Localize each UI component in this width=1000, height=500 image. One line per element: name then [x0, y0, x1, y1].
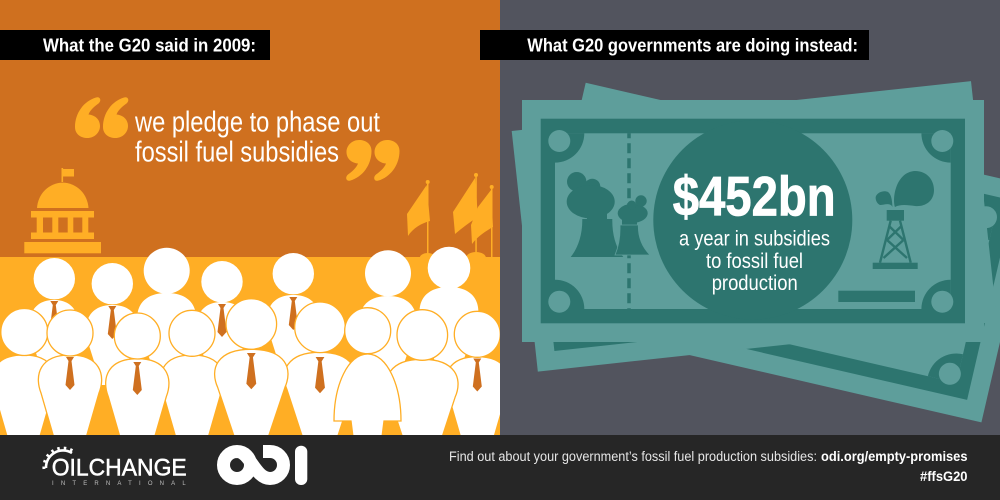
figure and caption: production	[712, 271, 798, 295]
call to action text: odi.org/empty-promises	[821, 449, 968, 464]
quote text: fossil fuel subsidies	[135, 137, 339, 169]
quote text: we pledge to phase out	[134, 107, 380, 139]
icon: flags	[407, 173, 494, 264]
delegate 7	[334, 308, 401, 437]
front banknote	[522, 100, 984, 342]
logo: ODI	[224, 446, 307, 485]
icon: capitol building	[24, 168, 101, 253]
icon: closing quotation mark	[346, 140, 400, 181]
crowd of delegates	[0, 247, 509, 449]
call to action text	[449, 449, 968, 484]
serial bar	[838, 291, 915, 302]
dashed tear line	[627, 133, 631, 309]
delegate 3	[106, 313, 169, 449]
delegate 1	[0, 308, 55, 445]
back row of delegates	[30, 247, 478, 385]
delegate 5	[215, 299, 288, 439]
figure and caption: $452bn	[673, 165, 836, 228]
heading: what the G20 said in 2009	[0, 30, 270, 60]
quote text	[134, 107, 380, 169]
middle banknote rotated counter-clockwise	[512, 81, 997, 372]
delegate 4	[160, 310, 224, 445]
icon: oil derrick	[873, 171, 934, 269]
delegate 6	[284, 302, 356, 442]
heading: what G20 governments are doing instead: What G20 governments are doing instead:	[527, 36, 858, 56]
banknote stack	[512, 81, 1000, 422]
icon: power plant cooling towers	[567, 172, 650, 257]
delegate 8	[387, 310, 458, 449]
front row of delegates	[0, 299, 509, 449]
footer bar	[0, 435, 1000, 500]
call to action text: #ffsG20	[920, 469, 968, 484]
central circle	[653, 120, 852, 320]
delegate 9	[446, 311, 509, 447]
panel: what G20 governments are doing instead	[480, 0, 1000, 435]
back banknote rotated clockwise	[531, 83, 1000, 422]
heading: what G20 governments are doing instead	[480, 30, 869, 60]
figure and caption	[673, 165, 836, 295]
logo: Oil Change International: OILCHANGE	[52, 455, 187, 482]
heading: what the G20 said in 2009: What the G20 said in 2009:	[43, 36, 256, 56]
call to action text: Find out about your government’s fossil fuel production subsidies:	[449, 449, 817, 464]
figure and caption: a year in subsidies	[679, 227, 830, 251]
icon: opening quotation mark	[75, 97, 128, 138]
panel: what the G20 said	[0, 0, 509, 449]
logo: Oil Change International	[44, 448, 187, 487]
figure and caption: to fossil fuel	[706, 249, 803, 273]
logo: Oil Change International: INTERNATIONAL	[52, 481, 186, 487]
delegate 2	[38, 310, 102, 445]
